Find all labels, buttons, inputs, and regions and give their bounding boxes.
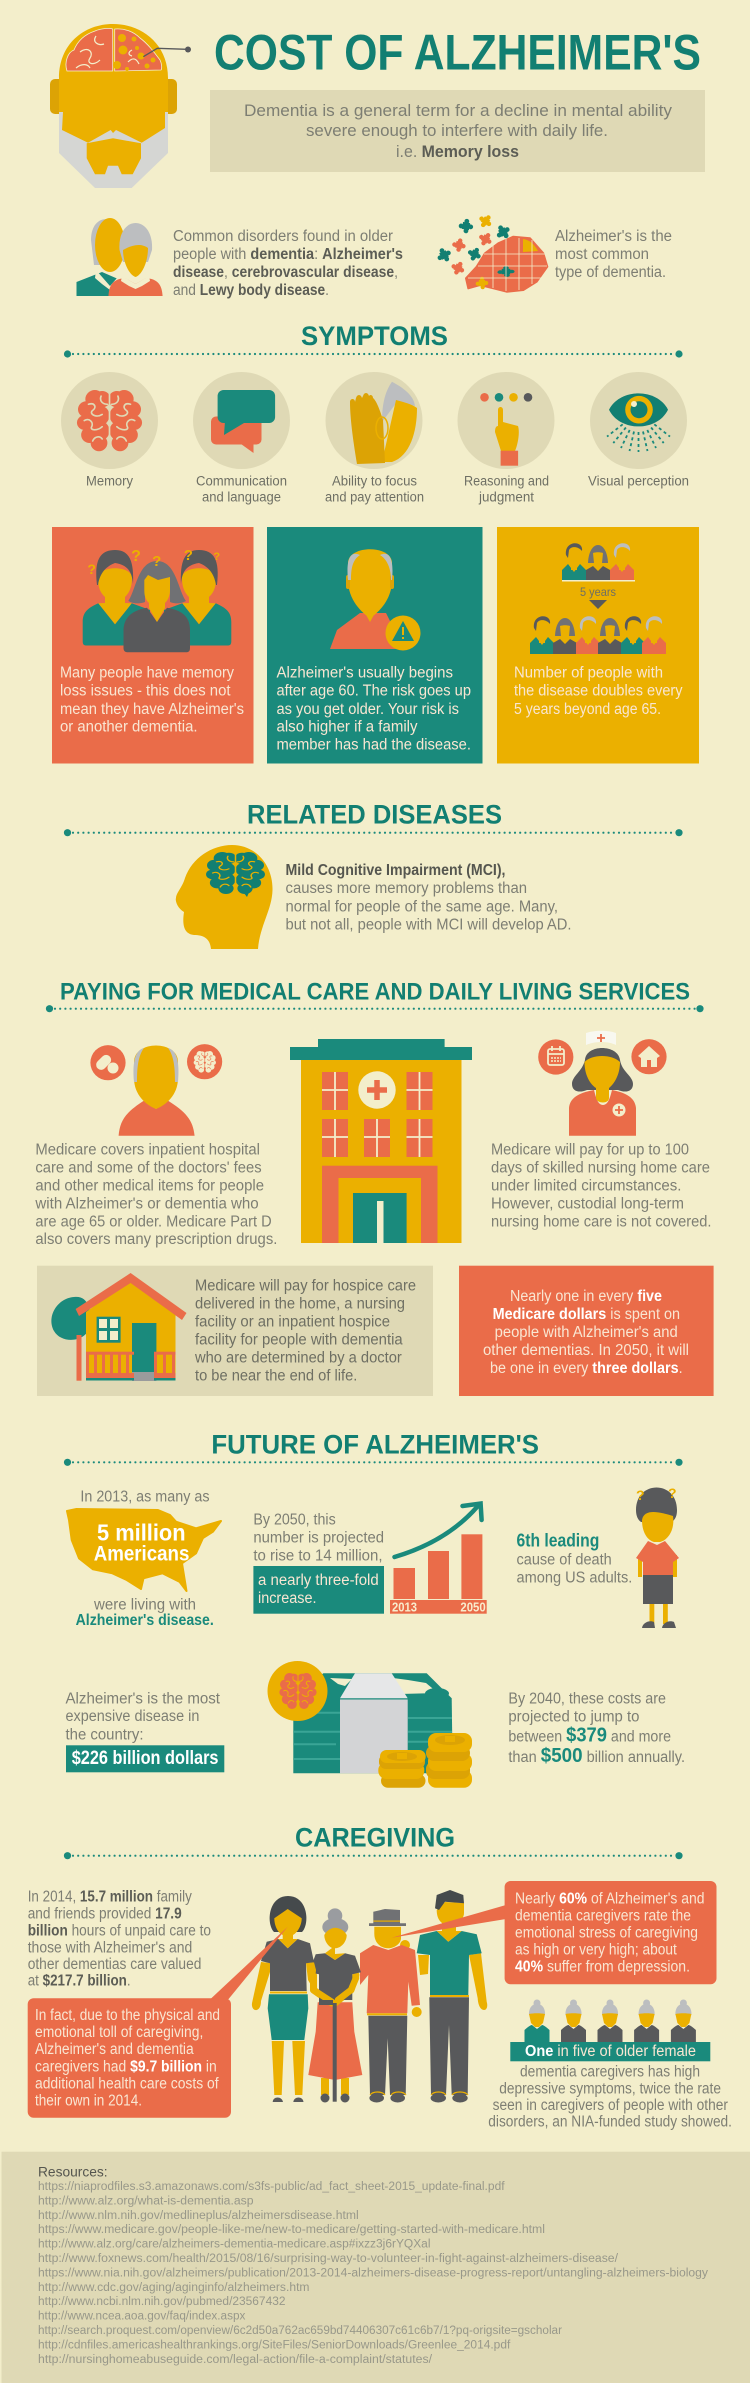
text: medicare inpatient: care and some of the doctors' fees — [35, 1159, 262, 1176]
heading: caregiving: CAREGIVING — [295, 1823, 455, 1853]
text: hospice: delivered in the home, a nursing — [195, 1296, 405, 1313]
panel: resources: http://nursinghomeabuseguide.com/legal-action/file-a-complaint/statutes/ — [38, 2354, 433, 2366]
label: reasoning: Reasoning and — [464, 474, 549, 488]
text: doubling: the disease doubles every — [514, 683, 683, 700]
panel: resources: https://www.medicare.gov/people-like-me/new-to-medicare/getting-started-with-medicare.html — [38, 2224, 545, 2236]
text: unpaid care: and friends provided 17.9 — [28, 1906, 182, 1923]
label: communication — [196, 474, 287, 504]
text: nursing home: nursing home care is not covered. — [491, 1213, 712, 1230]
text: by 2040: projected to jump to — [508, 1708, 639, 1725]
text: sixth leading — [516, 1531, 632, 1586]
text: mild cognitive impairment: but not all, people with MCI will develop AD. — [286, 916, 572, 933]
icon: three confused people: ? — [152, 553, 161, 570]
icon: boy: ? — [636, 1487, 645, 1503]
text: mild cognitive impairment: Mild Cognitive Impairment (MCI), — [286, 862, 506, 879]
icon: money stack, coins and brain — [268, 1661, 472, 1788]
text: mild cognitive impairment: causes more memory problems than — [286, 880, 527, 897]
icon: reasoning — [458, 372, 554, 469]
text: by 2050 — [253, 1511, 384, 1614]
callout: emotional stress: as high or very high; about — [515, 1941, 677, 1958]
callout: emotional stress: Nearly 60% of Alzheimer's and — [515, 1890, 704, 1907]
icon: communication — [193, 372, 290, 469]
text: memory loss issues: loss issues - this does not — [60, 683, 231, 700]
panel: dementia definition — [210, 90, 705, 172]
text: were living with: Alzheimer's disease. — [76, 1612, 214, 1629]
icon: head with teal brain — [176, 845, 273, 949]
text: medicare inpatient: are age 65 or older. Medicare Part D — [35, 1213, 272, 1230]
panel: dementia definition: severe enough to interfere with daily life. — [306, 121, 608, 140]
icon: ability to focus — [326, 372, 422, 469]
panel: resources: http://www.alz.org/what-is-dementia.asp — [38, 2195, 254, 2207]
figure: left man — [83, 550, 150, 646]
text: age risk: as you get older. Your risk is — [276, 701, 459, 718]
panel: medicare dollars: other dementias. In 2050, it will — [483, 1342, 689, 1359]
text: hospice: facility for people with dementia — [195, 1332, 403, 1349]
text: were living with: were living with — [93, 1596, 196, 1613]
panel: resources: http://cdnfiles.americashealthrankings.org/SiteFiles/SeniorDownloads/Greenlee_2014.pdf — [38, 2339, 511, 2351]
text: age risk — [276, 665, 471, 754]
heading: caregiving — [64, 1823, 683, 1859]
figure: woman — [252, 1896, 316, 2102]
text: by 2050: a nearly three-fold — [258, 1572, 379, 1589]
panel: hospice care — [37, 1266, 433, 1396]
text: by 2050: to rise to 14 million, — [253, 1547, 382, 1564]
text: medicare inpatient: and other medical items for people — [35, 1177, 264, 1194]
text: age risk: Alzheimer's usually begins — [276, 665, 453, 682]
panel: resources: http://www.alz.org/care/alzheimers-dementia-medicare.asp#ixzz3j6rYQXal — [38, 2239, 430, 2251]
icon: three confused people: ? — [131, 548, 141, 565]
figure: right man — [164, 550, 231, 646]
panel: resources: http://www.nlm.nih.gov/medlineplus/alzheimersdisease.html — [38, 2210, 359, 2222]
text: most expensive disease: the country: — [66, 1726, 144, 1743]
text: sixth leading: 6th leading — [516, 1531, 599, 1551]
text: unpaid care: In 2014, 15.7 million family — [28, 1889, 192, 1906]
label: ability to focus: and pay attention — [325, 490, 424, 504]
text: were living with — [76, 1596, 214, 1629]
panel: memory loss card — [52, 527, 254, 764]
panel: resources: http://www.cdc.gov/aging/aginginfo/alzheimers.htm — [38, 2282, 310, 2294]
panel: age risk card — [267, 527, 482, 764]
heading: future of alzheimer's — [64, 1429, 683, 1466]
text: sixth leading: among US adults. — [516, 1569, 632, 1586]
callout: additional health care costs: Alzheimer's and dementia — [35, 2041, 194, 2058]
text: hospice — [194, 1278, 416, 1385]
text: depressive symptoms — [488, 2064, 732, 2131]
panel: medicare dollars — [459, 1266, 714, 1396]
bar chart: growth 2013 to 2050 — [390, 1504, 487, 1615]
label: ability to focus — [325, 474, 424, 504]
text: common disorders: disease, cerebrovascular disease, — [173, 264, 398, 281]
text: hospice: who are determined by a doctor — [194, 1350, 402, 1367]
illustration: four family members — [252, 1890, 487, 2102]
callout: additional health care costs: emotional toll of caregiving, — [35, 2024, 203, 2041]
text: medicare inpatient: with Alzheimer's or dementia who — [34, 1195, 259, 1212]
text: hospice: facility or an inpatient hospice — [195, 1314, 390, 1331]
text: nursing home: under limited circumstances. — [491, 1177, 682, 1194]
coin stack: tall — [426, 1733, 472, 1788]
icon: three confused people: ? — [213, 551, 220, 563]
panel: dementia definition: i.e. Memory loss — [396, 142, 519, 161]
figure: woman — [124, 561, 190, 652]
text: mild cognitive impairment — [286, 862, 572, 933]
text: in 2013: In 2013, as many as — [80, 1489, 210, 1506]
heading: related diseases: RELATED DISEASES — [247, 799, 502, 829]
text: medicare inpatient: Medicare covers inpatient hospital — [35, 1141, 260, 1158]
text: most common type — [555, 228, 672, 281]
text: common disorders: people with dementia: Alzheimer's — [173, 246, 403, 263]
text: nursing home — [491, 1141, 712, 1230]
panel: resources: Resources: — [38, 2164, 108, 2180]
text: common disorders: and Lewy body disease. — [173, 282, 329, 299]
icon: older couple — [76, 218, 163, 296]
label: ability to focus: Ability to focus — [332, 474, 417, 488]
icon: puzzle brain — [434, 211, 547, 292]
text: age risk: after age 60. The risk goes up — [276, 683, 471, 700]
text: doubling: 5 years beyond age 65. — [514, 701, 661, 718]
label: communication: Communication — [196, 474, 287, 488]
text: sixth leading: cause of death — [516, 1551, 612, 1568]
panel: medicare dollars: Nearly one in every five — [510, 1288, 662, 1305]
text: most expensive disease: expensive disease in — [66, 1708, 199, 1725]
icon: memory — [61, 372, 158, 469]
banner: one in five: One in five of older female — [525, 2043, 696, 2060]
text: mild cognitive impairment: normal for people of the same age. Many, — [286, 899, 558, 916]
icon: three confused people: ? — [87, 561, 96, 577]
panel: resources: http://search.proquest.com/openview/6c2d50a762ac659bd74406307c61c6b7/1?pq-origsite=gscholar — [38, 2325, 562, 2337]
callout: emotional stress: dementia caregivers rate the — [515, 1907, 691, 1924]
icon: hospital building — [290, 1039, 472, 1243]
heading: related diseases — [64, 799, 683, 836]
text: nursing home: Medicare will pay for up to 100 — [491, 1141, 689, 1158]
icon: older man with warning — [330, 549, 420, 650]
text: depressive symptoms: depressive symptoms, twice the rate — [499, 2080, 721, 2097]
icon: nurse — [538, 1031, 667, 1136]
text: memory loss issues: mean they have Alzheimer's — [60, 701, 244, 718]
text: by 2050: number is projected — [253, 1529, 384, 1546]
icon: boy — [636, 1485, 679, 1628]
callout: additional health care costs: additional health care costs of — [35, 2076, 219, 2093]
panel: medicare dollars: people with Alzheimer's and — [495, 1324, 678, 1341]
text: memory loss issues — [60, 665, 244, 736]
panel: doubling card — [497, 527, 699, 764]
icon: five older women — [524, 2000, 696, 2042]
callout: additional health care costs — [28, 1927, 288, 2118]
coin stack: short — [378, 1750, 426, 1788]
icon: people doubling: 5 years — [580, 585, 616, 599]
text: hospice: Medicare will pay for hospice care — [195, 1278, 416, 1295]
text: by 2050: increase. — [258, 1590, 316, 1607]
text: unpaid care: at $217.7 billion. — [28, 1973, 131, 1990]
panel: resources — [2, 2152, 750, 2383]
text: most expensive disease: Alzheimer's is the most — [66, 1690, 221, 1707]
figure: tall man — [417, 1890, 487, 2102]
heading: future of alzheimer's: FUTURE OF ALZHEIMER'S — [211, 1429, 539, 1459]
figure: man with hat — [360, 1909, 422, 2102]
panel: dementia definition: Dementia is a general term for a decline in mental ability — [244, 101, 672, 120]
label: communication: and language — [202, 490, 281, 504]
text: unpaid care: other dementias care valued — [28, 1956, 201, 1973]
callout: additional health care costs: In fact, due to the physical and — [35, 2007, 220, 2024]
label: reasoning: judgment — [478, 490, 534, 504]
icon: visual perception — [590, 372, 687, 469]
panel: resources: http://www.ncea.aoa.gov/faq/index.aspx — [38, 2311, 246, 2323]
text: most expensive disease: $226 billion dollars — [72, 1748, 218, 1769]
callout: additional health care costs: caregivers had $9.7 billion in — [35, 2058, 217, 2075]
callout: emotional stress: 40% suffer from depression. — [515, 1959, 690, 1976]
icon: older man with pills and brain — [90, 1044, 222, 1136]
icon: three confused people: ? — [184, 547, 193, 564]
text: by 2040: By 2040, these costs are — [508, 1690, 666, 1707]
icon: house with tree — [51, 1273, 187, 1381]
text: by 2050: By 2050, this — [253, 1511, 336, 1528]
text: unpaid care: those with Alzheimer's and — [28, 1939, 192, 1956]
icon: boy: ? — [668, 1485, 677, 1501]
text: age risk: also higher if a family — [276, 719, 418, 736]
text: memory loss issues: or another dementia. — [60, 719, 198, 736]
text: doubling: Number of people with — [514, 665, 663, 682]
icon: head with brain — [50, 24, 191, 188]
text: doubling — [514, 665, 683, 718]
text: common disorders: Common disorders found in older — [173, 228, 393, 245]
icon: three confused people — [83, 547, 231, 652]
text: most common type: Alzheimer's is the — [555, 228, 672, 245]
callout: emotional stress: emotional stress of caregiving — [515, 1924, 698, 1941]
map: 5 million americans — [67, 1509, 221, 1591]
text: nursing home: However, custodial long-term — [491, 1195, 684, 1212]
callout: additional health care costs: their own in 2014. — [35, 2093, 142, 2110]
callout: emotional stress — [392, 1881, 716, 1984]
text: age risk: member has had the disease. — [276, 737, 471, 754]
label: memory: Memory — [86, 474, 133, 488]
text: nursing home: days of skilled nursing home care — [491, 1159, 710, 1176]
bar chart: growth 2013 to 2050: 2050 — [460, 1601, 486, 1615]
heading: paying for medical care: PAYING FOR MEDICAL CARE AND DAILY LIVING SERVICES — [60, 978, 690, 1006]
panel: resources: https://niaprodfiles.s3.amazonaws.com/s3fs-public/ad_fact_sheet-2015_update-final.pdf — [38, 2181, 505, 2193]
text: medicare inpatient: also covers many prescription drugs. — [35, 1231, 277, 1248]
heading: symptoms — [64, 321, 683, 358]
panel: resources: https://www.nia.nih.gov/alzheimers/publication/2013-2014-alzheimers-disease-progress-report/untangling-alzheimers-biology — [38, 2267, 708, 2279]
panel: medicare dollars: Medicare dollars is spent on — [493, 1306, 680, 1323]
map: 5 million americans: Americans — [94, 1543, 189, 1566]
text: by 2040 — [508, 1690, 685, 1767]
text: most common type: most common — [555, 246, 649, 263]
icon: people doubling — [530, 543, 666, 654]
figure: old woman — [308, 1908, 362, 2102]
map: 5 million americans: 5 million — [97, 1520, 186, 1546]
text: common disorders — [173, 228, 403, 299]
text: unpaid care — [28, 1889, 211, 1990]
panel: resources: http://www.foxnews.com/health/2015/08/16/surprising-way-to-volunteer-in-fight-against-alzheimers-disease/ — [38, 2253, 619, 2265]
text: medicare inpatient — [34, 1141, 277, 1248]
bar chart: growth 2013 to 2050: 2013 — [392, 1601, 417, 1615]
text: by 2040: than $500 billion annually. — [508, 1745, 685, 1767]
text: most common type: type of dementia. — [555, 264, 666, 281]
text: hospice: to be near the end of life. — [195, 1368, 357, 1385]
heading: symptoms: SYMPTOMS — [301, 321, 448, 351]
panel: resources: http://www.ncbi.nlm.nih.gov/pubmed/23567432 — [38, 2296, 286, 2308]
text: depressive symptoms: dementia caregivers has high — [520, 2064, 700, 2081]
text: most expensive disease — [66, 1690, 224, 1772]
text: by 2040: between $379 and more — [508, 1725, 671, 1747]
label: reasoning — [464, 474, 549, 504]
label: visual perception: Visual perception — [588, 474, 689, 488]
text: memory loss issues: Many people have memory — [60, 665, 234, 682]
text: unpaid care: billion hours of unpaid care to — [28, 1922, 211, 1939]
panel: medicare dollars: be one in every three dollars. — [490, 1360, 683, 1377]
